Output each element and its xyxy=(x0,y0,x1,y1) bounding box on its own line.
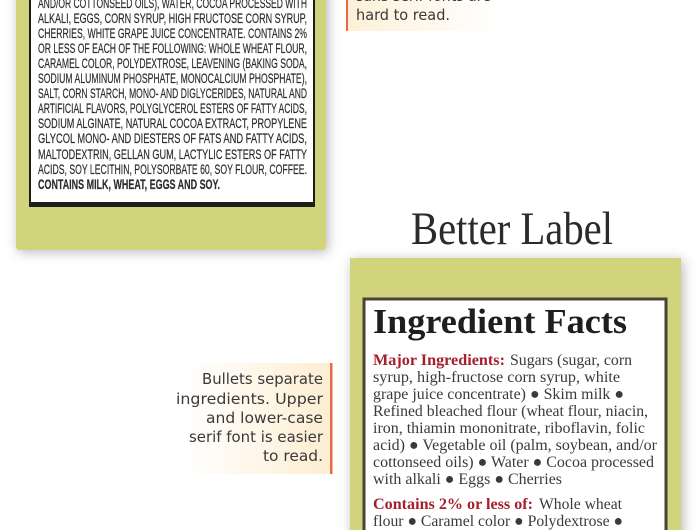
ingredient text: ARTIFICIAL FLAVORS, POLYGLYCEROL ESTERS OF FATTY ACIDS, xyxy=(38,100,307,116)
ingredient text xyxy=(38,0,307,192)
ingredient text: ACIDS, SOY LECITHIN, POLYSORBATE 60, SOY FLOUR, COFFEE. xyxy=(38,161,307,177)
major ingredients text xyxy=(373,352,658,488)
minor ingredients text: flour ● Caramel color ● Polydextrose ● xyxy=(373,513,623,530)
major ingredients text: iron, thiamin mononitrate, riboflavin, folic xyxy=(373,420,645,437)
minor ingredients text: Whole wheat xyxy=(539,496,623,513)
heading: Ingredient Facts: Ingredient Facts xyxy=(373,302,627,341)
ingredient text: OR LESS OF EACH OF THE FOLLOWING: WHOLE WHEAT FLOUR, xyxy=(38,40,307,56)
major ingredients text: syrup, high-fructose corn syrup, white xyxy=(373,369,620,386)
callout: bullets separate ingredients: to read. xyxy=(263,447,323,465)
ingredient text: SODIUM ALUMINUM PHOSPHATE, MONOCALCIUM PHOSPHATE), xyxy=(38,70,307,86)
panel: original label xyxy=(16,0,326,250)
ingredient text: CHERRIES, WHITE GRAPE JUICE CONCENTRATE. CONTAINS 2% xyxy=(38,25,307,41)
ingredient text: SALT, CORN STARCH, MONO- AND DIGLYCERIDES, NATURAL AND xyxy=(38,85,307,101)
major ingredients text: with alkali ● Eggs ● Cherries xyxy=(373,471,562,488)
ingredient text: SODIUM ALGINATE, NATURAL COCOA EXTRACT, PROPYLENE xyxy=(38,115,307,131)
major ingredients text: acid) ● Vegetable oil (palm, soybean, and/or xyxy=(373,437,658,454)
callout: bullets separate ingredients: ingredients. Upper xyxy=(176,390,324,408)
major ingredients text: Sugars (sugar, corn xyxy=(510,352,632,369)
callout: bullets separate ingredients: and lower-case xyxy=(206,409,323,427)
callout: sans serif fonts: hard to read. xyxy=(356,6,450,24)
callout: bullets separate ingredients xyxy=(176,363,332,474)
ingredient text: ALKALI, EGGS, CORN SYRUP, HIGH FRUCTOSE CORN SYRUP, xyxy=(38,10,307,26)
heading: Better Label: Better Label xyxy=(411,203,613,255)
callout: bullets separate ingredients: serif font is easier xyxy=(189,428,324,446)
ingredient facts box xyxy=(364,299,666,530)
callout: bullets separate ingredients: Bullets separate xyxy=(202,370,323,388)
major ingredients text: Major Ingredients: xyxy=(373,352,505,369)
callout: sans serif fonts xyxy=(346,0,498,31)
major ingredients text: grape juice concentrate) ● Skim milk ● xyxy=(373,386,624,403)
ingredient text: CARAMEL COLOR, POLYDEXTROSE, LEAVENING (BAKING SODA, xyxy=(38,55,307,71)
major ingredients text: Refined bleached flour (wheat flour, niacin, xyxy=(373,403,648,420)
ingredient text: CONTAINS MILK, WHEAT, EGGS AND SOY. xyxy=(38,176,220,192)
major ingredients text: cottonseed oils) ● Water ● Cocoa processed xyxy=(373,454,654,471)
panel: better label xyxy=(350,258,681,530)
ingredient label box xyxy=(29,0,315,207)
minor ingredients text: Contains 2% or less of: xyxy=(373,496,533,513)
ingredient text: GLYCOL MONO- AND DIESTERS OF FATS AND FATTY ACIDS, xyxy=(38,130,307,146)
minor ingredients text xyxy=(373,496,623,530)
ingredient text: MALTODEXTRIN, GELLAN GUM, LACTYLIC ESTERS OF FATTY xyxy=(38,146,307,162)
